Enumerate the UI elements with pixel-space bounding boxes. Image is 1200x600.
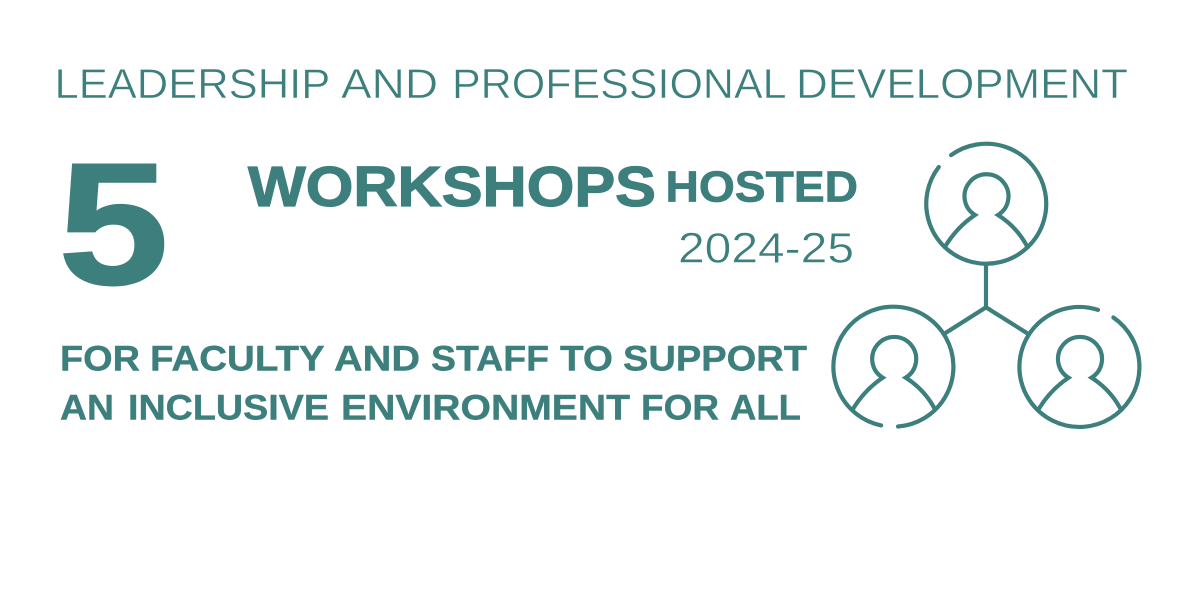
description text: FACULTY (150, 338, 325, 378)
heading: workshops: WORKSHOPS (248, 155, 656, 219)
title: DEVELOPMENT (796, 60, 1128, 107)
icon: connected people network (833, 144, 1139, 427)
description text: INCLUSIVE (128, 388, 329, 428)
description text: TO (560, 338, 613, 378)
description text: SUPPORT (623, 338, 807, 378)
big number 5: 5 (58, 126, 169, 321)
date: 2024-25: 2024-25 (678, 224, 854, 272)
icon: bottom left person (833, 307, 953, 426)
description text: AN (60, 388, 114, 428)
description text: FOR (60, 338, 140, 378)
description text: ALL (730, 388, 801, 428)
description text (60, 338, 807, 428)
description text: STAFF (431, 338, 549, 378)
description text: FOR (641, 388, 719, 428)
title: LEADERSHIP (54, 60, 330, 107)
heading: hosted: HOSTED (666, 164, 858, 212)
icon: top person (926, 144, 1046, 264)
icon: connector lines (945, 265, 1027, 333)
title: AND (341, 60, 438, 107)
description text: AND (334, 338, 420, 378)
description text: ENVIRONMENT (341, 388, 630, 428)
icon: bottom right person (1019, 307, 1139, 427)
title: PROFESSIONAL (452, 60, 785, 107)
